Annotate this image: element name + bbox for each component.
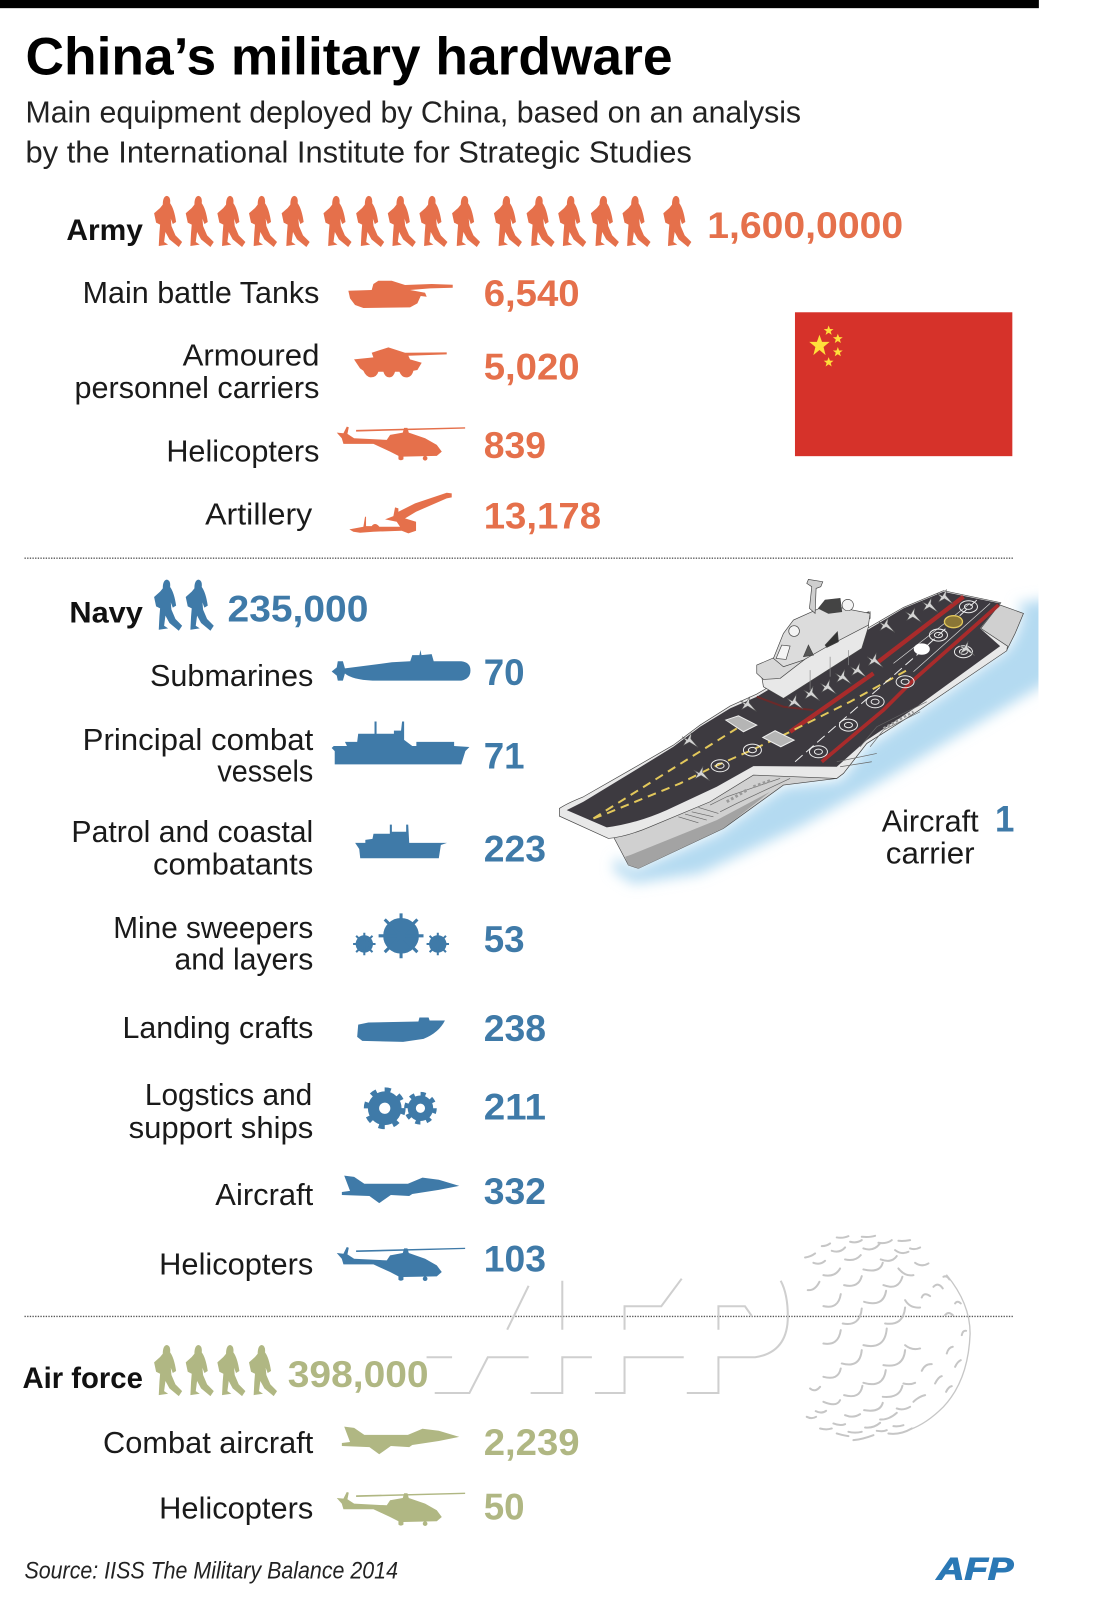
label: combat aircraft: Combat aircraft <box>103 1426 314 1460</box>
value: navy aircraft: 332 <box>484 1171 546 1212</box>
source: Source: IISS The Military Balance 2014 <box>24 1558 398 1585</box>
deck rim <box>559 591 1007 838</box>
label: principal combat vessels: Principal combat <box>83 723 314 757</box>
icon: armoured carrier <box>354 347 447 377</box>
value: army helicopters: 839 <box>484 425 546 466</box>
hull <box>613 605 1023 868</box>
label: principal combat vessels: vessels <box>217 755 313 789</box>
icon: submarine <box>332 650 470 681</box>
label: armoured personnel carriers <box>74 338 319 405</box>
subtitle: Main equipment deployed by China, based on an analysis <box>26 95 801 129</box>
value: principal combat vessels: 71 <box>484 735 525 776</box>
air force total: 398,000 <box>288 1354 429 1395</box>
AFP logo: AFP <box>936 1551 1014 1587</box>
value: landing crafts: 238 <box>484 1008 546 1049</box>
navy heading: Navy <box>69 597 143 630</box>
icon: army helicopter <box>337 427 465 461</box>
icon: patrol boat <box>355 825 447 858</box>
subtitle: by the International Institute for Strategic Studies <box>26 135 692 169</box>
label: landing crafts: Landing crafts <box>122 1011 313 1045</box>
label: patrol and coastal combatants: combatants <box>153 848 313 882</box>
title: China’s military hardware <box>26 27 673 86</box>
label: army helicopters: Helicopters <box>166 434 319 468</box>
top bar <box>0 0 1039 8</box>
hull details <box>678 702 927 823</box>
label: armoured personnel carriers: Armoured <box>183 338 319 372</box>
value: tanks: 6,540 <box>484 273 580 314</box>
icon: tank <box>348 281 453 308</box>
label: submarines: Submarines <box>150 659 313 693</box>
icon: air force soldiers <box>154 1345 277 1396</box>
panel: air force <box>22 1345 580 1528</box>
icon: navy soldiers <box>154 580 214 631</box>
label: air force helicopters: Helicopters <box>159 1492 313 1526</box>
panel: army <box>66 196 903 537</box>
value: submarines: 70 <box>484 652 525 693</box>
island superstructure <box>757 579 870 698</box>
stripes <box>593 597 998 818</box>
value: mine sweepers: 53 <box>484 919 525 960</box>
air force heading: Air force <box>22 1362 143 1395</box>
label: tanks: Main battle Tanks <box>83 276 319 310</box>
icon: landing craft <box>357 1017 445 1042</box>
icon: mines <box>353 913 449 958</box>
label: navy aircraft: Aircraft <box>215 1178 314 1212</box>
navy total: 235,000 <box>228 588 368 629</box>
illustration: aircraft carrier <box>559 579 1057 883</box>
label: patrol and coastal combatants: Patrol and coastal <box>71 815 313 849</box>
label: principal combat vessels <box>83 723 314 789</box>
label: mine sweepers and layers <box>113 911 313 976</box>
label: mine sweepers and layers: and layers <box>175 942 313 976</box>
value: navy helicopters: 103 <box>484 1239 546 1280</box>
icon: air force helicopter <box>337 1492 465 1526</box>
water <box>613 598 1057 883</box>
label: aircraft carrier: carrier <box>886 836 975 870</box>
flight deck <box>567 592 1000 827</box>
army heading: Army <box>66 214 143 247</box>
label: navy helicopters: Helicopters <box>159 1248 313 1282</box>
army total: 1,600,0000 <box>707 205 903 246</box>
label: armoured personnel carriers: personnel carriers <box>74 371 319 405</box>
label: patrol and coastal combatants <box>71 815 313 882</box>
watermark: globe <box>805 1236 970 1440</box>
icon: army soldiers <box>154 196 691 247</box>
subtitle <box>26 95 801 169</box>
hatches <box>726 716 794 747</box>
panel: navy <box>69 580 546 1282</box>
label: logistics and support ships: support ships <box>129 1111 313 1145</box>
value: air force helicopters: 50 <box>484 1487 525 1528</box>
value: logistics: 211 <box>484 1086 546 1127</box>
value: combat aircraft: 2,239 <box>484 1422 580 1463</box>
deck markings <box>711 601 977 772</box>
icon: warship <box>332 721 469 764</box>
icon: combat aircraft <box>342 1427 459 1454</box>
parked aircraft <box>682 589 975 781</box>
value: artillery: 13,178 <box>484 496 601 537</box>
icon: China flag <box>795 312 1012 456</box>
label: artillery: Artillery <box>205 498 313 532</box>
icon: artillery <box>349 493 452 533</box>
value: aircraft carrier: 1 <box>995 799 1014 840</box>
label: aircraft carrier: Aircraft <box>882 805 979 839</box>
watermark: AFP <box>427 1236 970 1440</box>
label: logistics and support ships <box>129 1078 313 1145</box>
label: logistics and support ships: Logstics and <box>145 1078 312 1112</box>
label: mine sweepers and layers: Mine sweepers <box>113 911 313 945</box>
icon: gears <box>366 1090 435 1127</box>
icon: navy helicopter <box>337 1247 465 1281</box>
label: aircraft carrier <box>882 799 1014 870</box>
value: armoured carriers: 5,020 <box>484 347 580 388</box>
value: patrol and coastal: 223 <box>484 828 546 869</box>
icon: navy aircraft <box>342 1176 459 1203</box>
